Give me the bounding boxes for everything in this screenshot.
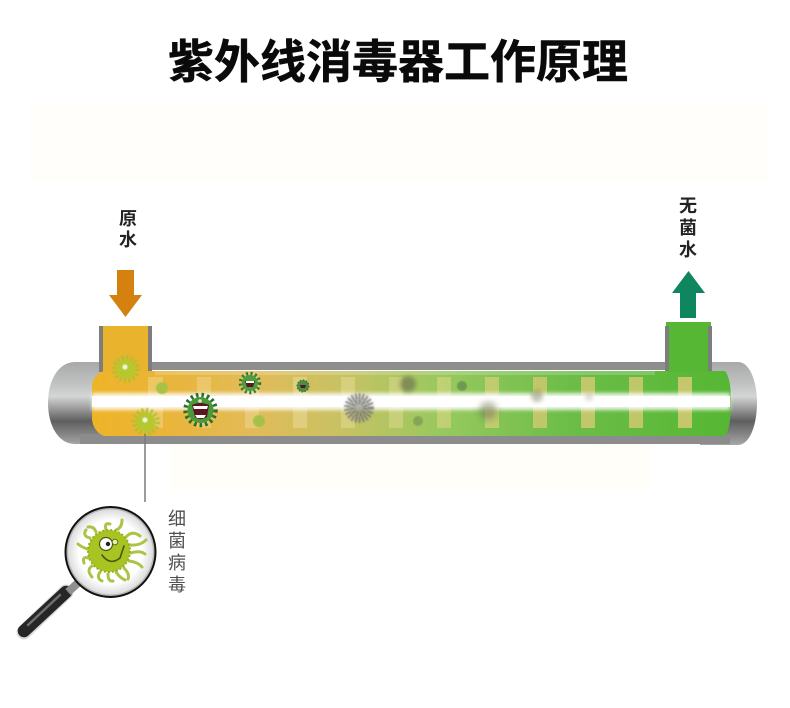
dead virus: faint lower <box>413 416 423 426</box>
icon: magnifier with bacterium <box>24 507 156 632</box>
right tube cap <box>700 362 757 445</box>
label: bacteria and viruses: 细 <box>168 509 186 529</box>
background panel: faint cream band <box>30 103 768 181</box>
uv lamp <box>92 393 730 410</box>
leader line <box>144 434 146 502</box>
label: bacteria and viruses: 菌 <box>168 531 186 551</box>
bacterium second eye <box>112 539 118 545</box>
label: sterile water <box>679 196 697 260</box>
outlet pipe wall <box>665 326 712 372</box>
label: raw water: 水 <box>119 230 137 250</box>
virus: large green <box>186 395 216 425</box>
bacterium in lens <box>78 520 146 581</box>
background panel: faint cream strip under tube <box>170 444 650 489</box>
tube top wall <box>105 362 705 370</box>
tube bottom wall <box>80 434 730 444</box>
dead virus: trace <box>531 390 543 402</box>
bacterium body <box>88 530 130 572</box>
label: sterile water: 无 <box>679 196 697 216</box>
bacterium: yellow lower <box>134 410 158 434</box>
dead virus: last trace <box>585 393 593 401</box>
inlet pipe wall <box>99 326 152 372</box>
label: bacteria and viruses <box>168 509 186 595</box>
dead virus: grey cloud <box>346 395 372 421</box>
bacterium: yellow at inlet <box>114 358 138 380</box>
left tube cap <box>48 362 110 444</box>
arrow: water out <box>672 271 705 318</box>
virus: small dark <box>297 380 309 392</box>
outlet water <box>666 322 711 372</box>
label: raw water <box>119 209 137 250</box>
magnifier lens <box>66 508 154 596</box>
bacterium smile <box>102 546 124 561</box>
inlet water <box>103 326 148 372</box>
bacterium tentacles <box>78 520 146 581</box>
bacterium: small pale lower <box>253 415 265 427</box>
label: sterile water: 菌 <box>679 218 697 238</box>
title: 紫外线消毒器工作原理 <box>168 36 628 88</box>
label: bacteria and viruses: 毒 <box>168 575 186 595</box>
bacterium: small pale <box>156 382 168 394</box>
uv sterilizer tube <box>48 322 757 445</box>
dead virus: faint <box>457 381 467 391</box>
arrow: water in <box>109 270 142 317</box>
magnifier handle <box>24 582 79 632</box>
label: bacteria and viruses: 病 <box>168 553 186 573</box>
water top haze <box>155 370 655 375</box>
dead virus: fading cloud <box>479 402 497 420</box>
label: raw water: 原 <box>119 209 137 229</box>
dead virus: grey upper <box>400 376 416 392</box>
quartz sleeve bars <box>148 377 692 428</box>
virus: medium green <box>240 374 260 392</box>
water body <box>92 371 731 436</box>
label: sterile water: 水 <box>679 240 697 260</box>
bacterium eye <box>100 538 112 550</box>
